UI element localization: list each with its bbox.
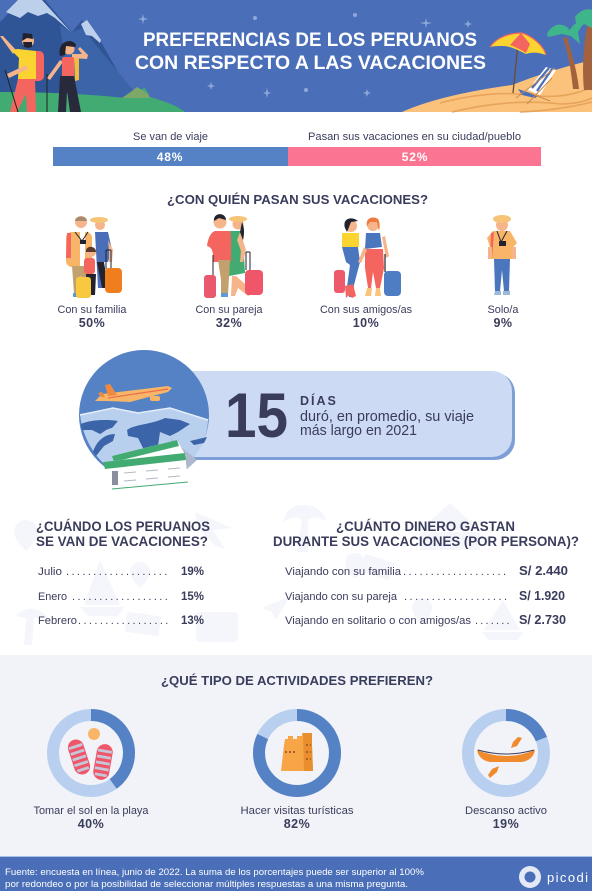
column: friends bbox=[320, 217, 412, 330]
activity: active rest: 19% bbox=[493, 817, 519, 831]
activity: active rest: Descanso activo bbox=[465, 805, 547, 817]
list: spending: ....... bbox=[475, 615, 512, 627]
list: months: ................... bbox=[66, 566, 170, 578]
list: months: ................. bbox=[78, 615, 171, 627]
icon: solo traveller bbox=[487, 215, 517, 295]
heading: activities: ¿QUÉ TIPO DE ACTIVIDADES PREFIEREN? bbox=[161, 673, 433, 688]
stacked bar: travel vs stay: Se van de viaje bbox=[133, 131, 208, 143]
list: months: 15% bbox=[181, 589, 204, 603]
list: spending: Viajando con su pareja bbox=[285, 591, 398, 603]
list: months: 19% bbox=[181, 564, 204, 578]
column: couple bbox=[196, 214, 263, 330]
title: CON RESPECTO A LAS VACACIONES bbox=[135, 53, 486, 74]
column: solo: Solo/a bbox=[488, 304, 519, 316]
source note bbox=[5, 867, 425, 890]
footer bbox=[0, 856, 592, 891]
callout: 15 dias: 15 bbox=[225, 381, 288, 451]
heading: when: ¿CUÁNDO LOS PERUANOS bbox=[36, 519, 210, 534]
heading: when: SE VAN DE VACACIONES? bbox=[36, 534, 208, 549]
list: months: Julio bbox=[38, 566, 62, 578]
list: months: Febrero bbox=[38, 615, 77, 627]
column: solo bbox=[487, 215, 519, 330]
icon: canoe bbox=[477, 737, 535, 778]
heading: money bbox=[273, 519, 579, 549]
stacked bar: travel vs stay: 52% bbox=[402, 150, 428, 164]
heading: money: ¿CUÁNTO DINERO GASTAN bbox=[336, 519, 515, 534]
activity: active rest bbox=[465, 715, 547, 831]
title: PREFERENCIAS DE LOS PERUANOS bbox=[143, 30, 477, 51]
stacked bar: travel vs stay: Pasan sus vacaciones en su ciudad/pueblo bbox=[308, 131, 521, 143]
panel: activities bbox=[0, 655, 592, 856]
icon: tower bbox=[281, 733, 313, 771]
heading: when bbox=[36, 519, 210, 549]
logo: picodi: picodi bbox=[547, 870, 589, 885]
icon: male hiker bbox=[0, 33, 44, 112]
list: spending: Viajando en solitario o con amigos/as bbox=[285, 615, 472, 627]
activity: beach: Tomar el sol en la playa bbox=[34, 805, 149, 817]
list: months bbox=[38, 564, 204, 627]
list: spending: S/ 2.440 bbox=[519, 564, 568, 578]
icon: mountains bbox=[0, 0, 185, 112]
column: family: Con su familia bbox=[58, 304, 127, 316]
source note: Fuente: encuesta en línea, junio de 2022. La suma de los porcentajes puede ser superior al 100% bbox=[5, 867, 425, 878]
title bbox=[135, 30, 486, 74]
icon: flip flops bbox=[66, 728, 114, 781]
icon: couple bbox=[204, 214, 263, 298]
list: spending: S/ 1.920 bbox=[519, 589, 565, 603]
section: money bbox=[273, 519, 579, 627]
donut chart 40% bbox=[53, 715, 129, 791]
activity: sightseeing: 82% bbox=[284, 817, 310, 831]
column: couple: 32% bbox=[216, 316, 242, 330]
column: family: 50% bbox=[79, 316, 105, 330]
icon: beach bbox=[402, 9, 592, 112]
callout: 15 dias: duró, en promedio, su viaje bbox=[300, 408, 474, 425]
callout: 15 dias: más largo en 2021 bbox=[300, 422, 417, 439]
icon: deck chair bbox=[516, 67, 556, 104]
logo: picodi bbox=[519, 866, 589, 888]
donut chart 19% bbox=[468, 715, 544, 791]
column: solo: 9% bbox=[493, 316, 513, 330]
icon: friends bbox=[334, 217, 401, 298]
stacked bar: travel vs stay: 48% bbox=[157, 150, 183, 164]
heading: con quien: ¿CON QUIÉN PASAN SUS VACACIONES? bbox=[167, 192, 428, 207]
list: spending: S/ 2.730 bbox=[519, 613, 566, 627]
heading: money: DURANTE SUS VACACIONES (POR PERSONA)? bbox=[273, 534, 579, 549]
source note: por redondeo o por la posibilidad de seleccionar múltiples respuestas a una misma pregunta. bbox=[5, 879, 408, 890]
activity: beach: 40% bbox=[78, 817, 104, 831]
list: spending bbox=[285, 564, 568, 627]
list: spending: ................... bbox=[403, 566, 509, 578]
column: friends: Con sus amigos/as bbox=[320, 304, 412, 316]
icon: female hiker bbox=[47, 41, 88, 112]
column: family bbox=[58, 216, 127, 330]
list: months: Enero bbox=[38, 591, 67, 603]
icon: palm trees bbox=[547, 9, 592, 90]
list: months: 13% bbox=[181, 613, 204, 627]
list: months: .................. bbox=[72, 591, 170, 603]
icon: parasol bbox=[490, 33, 546, 93]
column: couple: Con su pareja bbox=[196, 304, 263, 316]
callout: 15 dias: DÍAS bbox=[300, 393, 338, 408]
icon: plane, map and tickets bbox=[79, 350, 209, 489]
activity: beach bbox=[34, 715, 149, 831]
background pattern bbox=[14, 503, 524, 645]
icon: family bbox=[66, 216, 122, 298]
header banner bbox=[0, 0, 592, 112]
donut chart 82% bbox=[259, 715, 335, 791]
activity: sightseeing: Hacer visitas turísticas bbox=[240, 805, 354, 817]
callout: 15 dias bbox=[79, 350, 515, 489]
activity: sightseeing bbox=[240, 715, 354, 831]
column: friends: 10% bbox=[353, 316, 379, 330]
stacked bar: travel vs stay bbox=[53, 131, 541, 166]
list: spending: ................... bbox=[404, 591, 510, 603]
section: when bbox=[36, 519, 210, 627]
list: spending: Viajando con su familia bbox=[285, 566, 402, 578]
